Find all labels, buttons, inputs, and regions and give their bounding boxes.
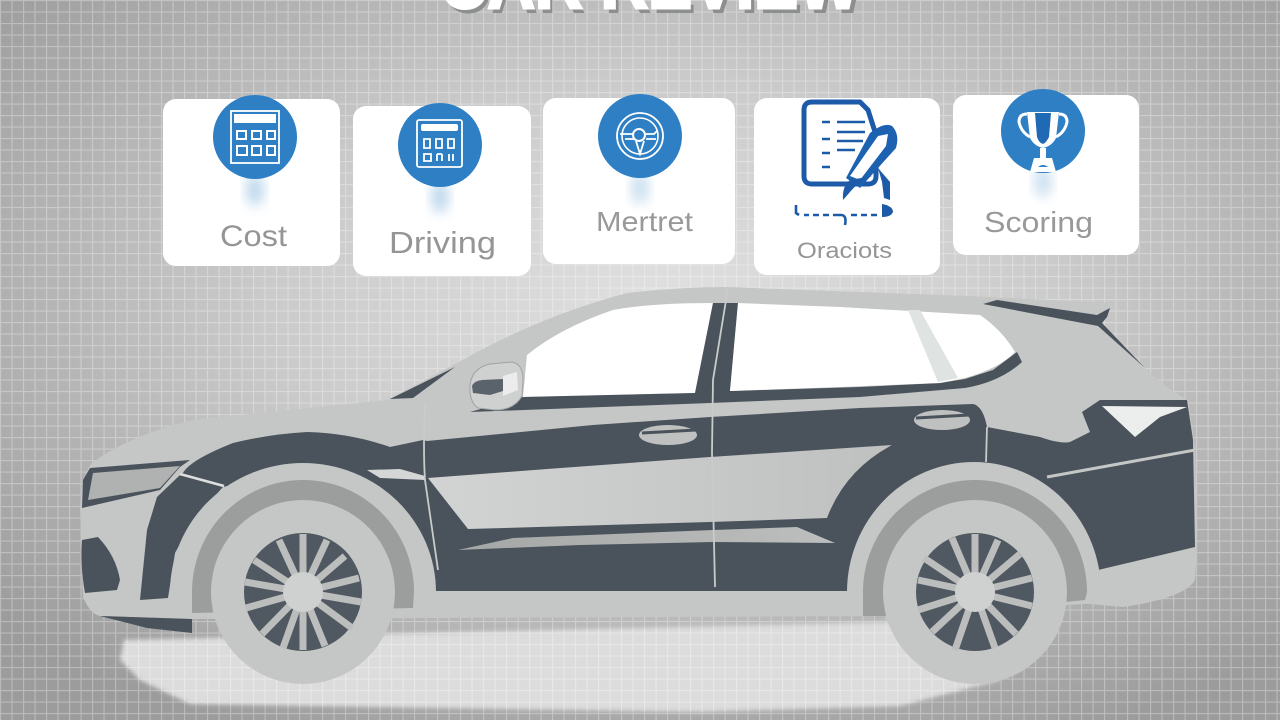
icon: driving calculator <box>398 103 482 187</box>
card: Scoring <box>953 89 1139 255</box>
card: Oraciots <box>754 98 940 275</box>
front fog lamp <box>81 537 120 593</box>
door handles <box>639 410 970 445</box>
dark body panels <box>180 400 1195 591</box>
side windows <box>470 303 1022 412</box>
door insert panel <box>428 445 892 529</box>
tail light <box>1102 406 1187 437</box>
windshield strip <box>390 367 455 399</box>
lower trim strip <box>458 527 835 550</box>
label: Driving: Driving <box>389 225 496 260</box>
icon: steering wheel <box>598 94 682 178</box>
rear wheel <box>847 462 1101 684</box>
icon: trophy <box>1001 89 1085 173</box>
card: Cost <box>163 95 340 266</box>
label: Cost: Cost <box>220 220 288 253</box>
door seam lines <box>424 288 987 587</box>
front wheel <box>170 463 440 684</box>
spoiler <box>983 300 1145 368</box>
icon: cost calculator <box>213 95 297 179</box>
rear body line <box>1047 450 1195 477</box>
headlight <box>82 460 190 508</box>
front fender panel <box>140 475 223 600</box>
car illustration <box>80 287 1197 684</box>
icon: document and pen <box>796 102 897 225</box>
label: Oraciots: Oraciots <box>797 238 892 263</box>
fender trim line <box>180 474 224 486</box>
card: Market <box>543 94 735 264</box>
car body silhouette <box>80 287 1197 619</box>
mirror <box>470 362 523 410</box>
label: Mertret: Mertret <box>596 206 693 237</box>
label: Scoring: Scoring <box>984 207 1093 239</box>
front splitter <box>100 616 192 633</box>
fender trim <box>367 469 425 480</box>
card: Driving <box>353 103 531 276</box>
